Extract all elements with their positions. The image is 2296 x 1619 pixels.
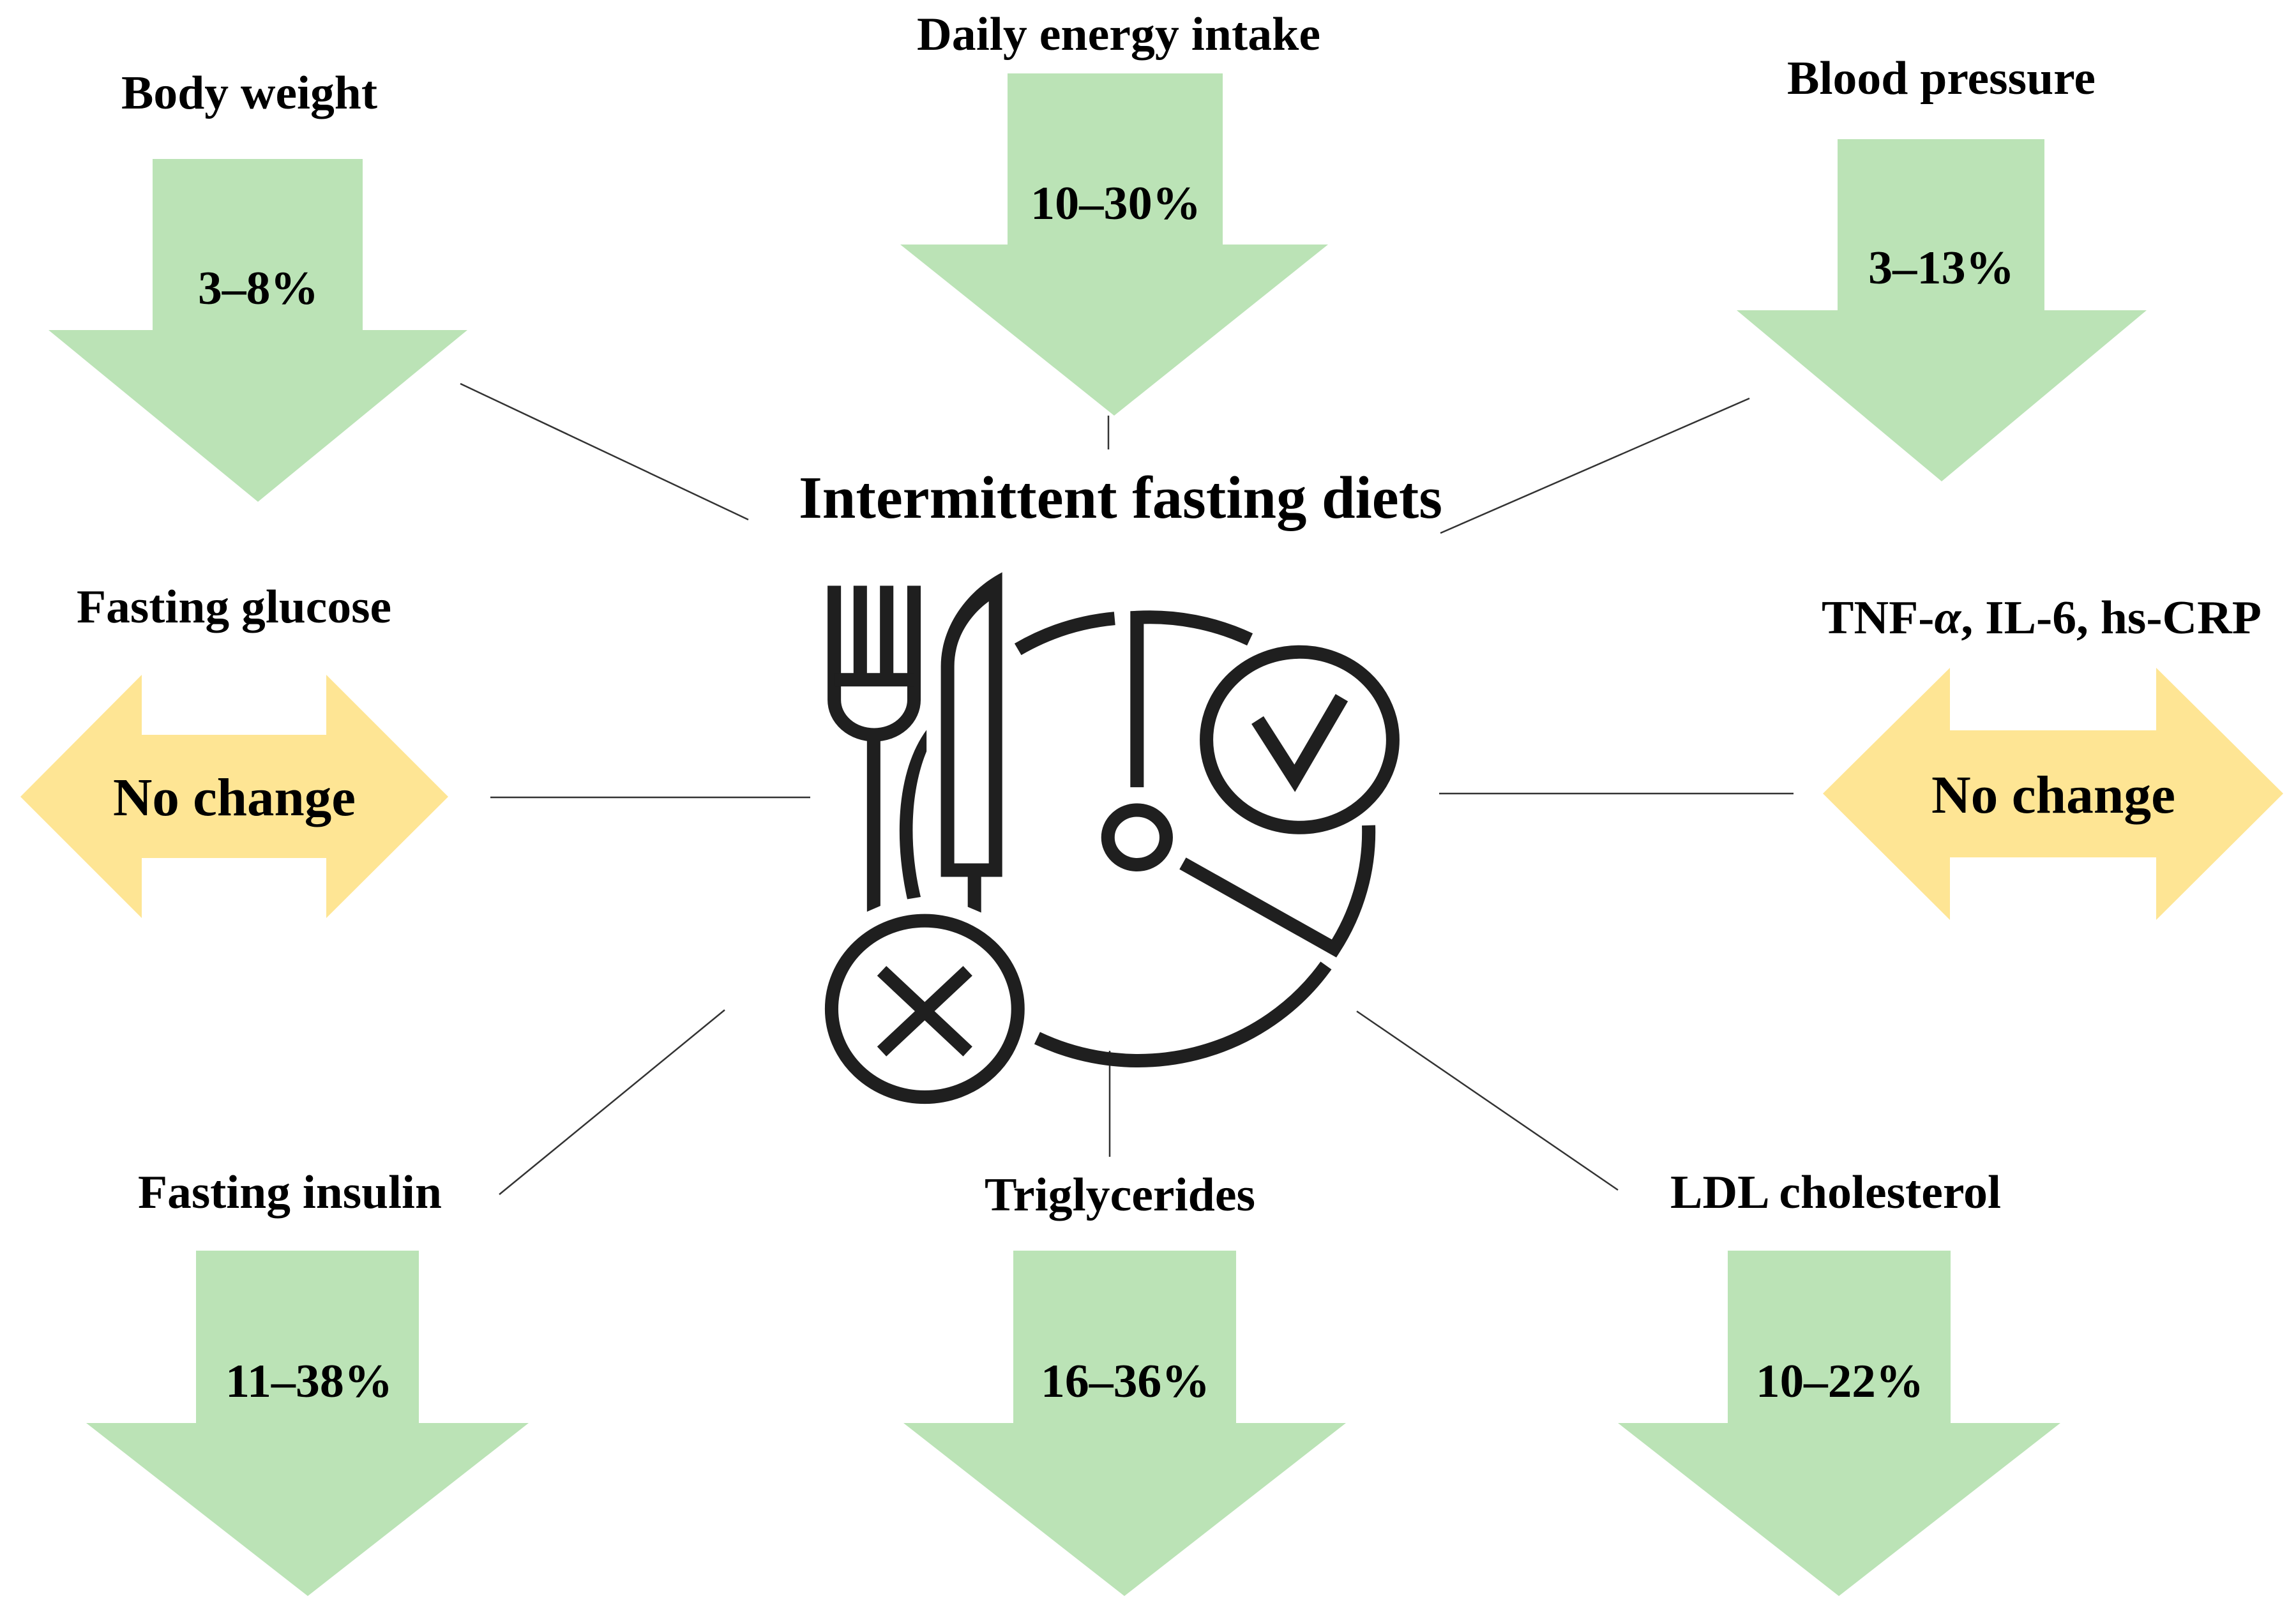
panel: inflammatory markers [1822,592,2283,920]
panel: blood pressure: Blood pressure [1787,52,2096,105]
panel: blood pressure: 3–13% [1868,242,2014,294]
panel: blood pressure [1737,52,2147,481]
icon: fork [835,585,926,912]
panel: LDL cholesterol: LDL cholesterol [1670,1166,2001,1219]
panel: body weight [49,67,467,502]
panel: fasting insulin [86,1166,529,1596]
icon: knife [941,572,1002,913]
icon: cross circle [831,921,1018,1097]
panel: triglycerides [903,1169,1346,1596]
panel: fasting glucose: Fasting glucose [77,581,391,633]
panel: triglycerides: Triglycerides [985,1169,1255,1221]
panel: fasting glucose [20,581,448,918]
connector lines [460,384,1794,1194]
panel: fasting insulin: Fasting insulin [138,1166,442,1219]
panel: LDL cholesterol: 10–22% [1756,1355,1924,1408]
icon: check circle [1207,652,1393,827]
panel: body weight: 3–8% [198,262,319,315]
panel: daily energy intake: 10–30% [1031,177,1201,230]
panel: inflammatory markers: TNF-α, IL-6, hs-CRP [1822,592,2262,644]
panel: LDL cholesterol [1618,1166,2060,1596]
icon: plate outline [1018,617,1369,1060]
panel: daily energy intake: Daily energy intake [917,8,1320,61]
icon: plate with fork, knife, check and cross [831,572,1393,1097]
panel: fasting insulin: 11–38% [225,1355,393,1408]
title: Intermittent fasting diets [799,465,1442,531]
panel: fasting glucose: No change [113,768,356,827]
panel: body weight: Body weight [121,67,377,119]
panel: inflammatory markers: No change [1931,765,2175,825]
panel: triglycerides: 16–36% [1041,1355,1210,1408]
panel: daily energy intake [900,8,1328,416]
